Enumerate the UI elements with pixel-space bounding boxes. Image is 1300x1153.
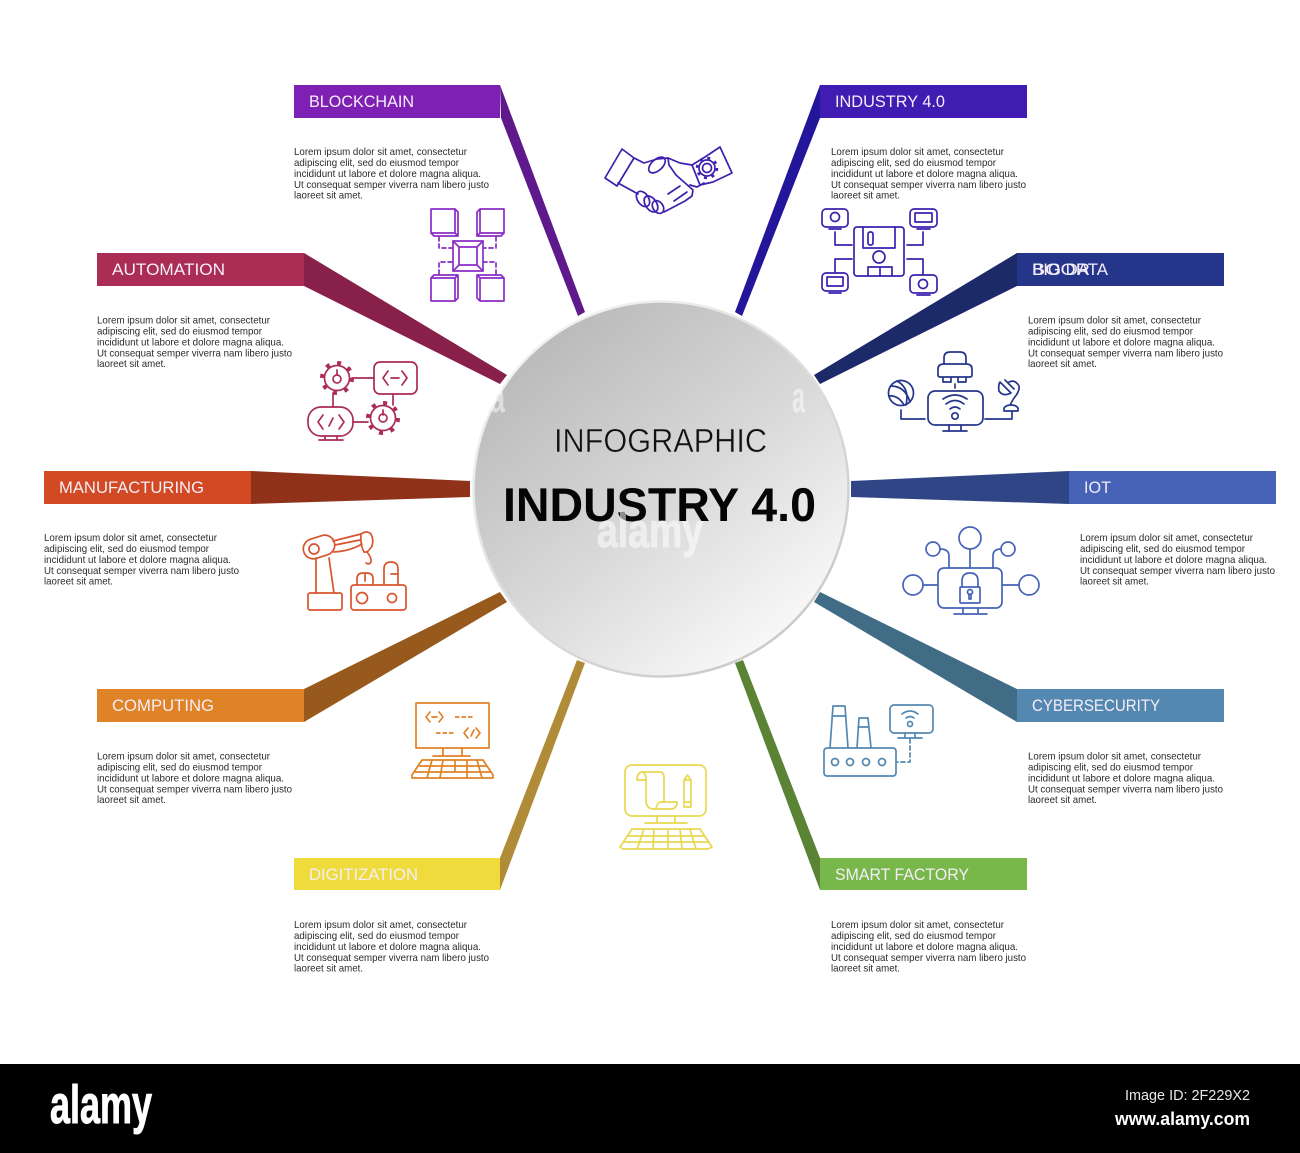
label bar: manufacturing [44,471,470,504]
footer image id: Image ID: 2F229X2 [1125,1087,1250,1104]
icon: robot arm and machine [301,532,406,610]
text block: digitization: Lorem ipsum dolor sit amet, consectetur [294,920,467,931]
text block: computing: adipiscing elit, sed do eiusmod tempor [97,762,262,774]
footer logo: alamy: alamy [50,1075,152,1135]
text block: digitization [294,920,489,974]
watermark: small marks on circle: a [490,373,505,422]
text block: automation: incididunt ut labore et dolore magna aliqua. [97,338,284,348]
text block: industry 4.0: Lorem ipsum dolor sit amet, consectetur [831,147,1004,158]
text block: digitization: adipiscing elit, sed do eiusmod tempor [294,931,459,942]
text block: smart factory: adipiscing elit, sed do eiusmod tempor [831,931,996,942]
text block: computing: laoreet sit amet. [97,795,166,806]
label bar: computing: COMPUTING [112,696,214,715]
text block: industry 4.0: incididunt ut labore et dolore magna aliqua. [831,169,1018,180]
panel: automation [97,253,507,440]
text block: cybersecurity [1028,752,1223,806]
text block: iot: adipiscing elit, sed do eiusmod tempor [1080,544,1245,555]
text block: big data: Lorem ipsum dolor sit amet, consectetur [1028,316,1201,326]
text block: iot: incididunt ut labore et dolore magna aliqua. [1080,555,1267,566]
panel: computing [97,592,507,806]
text block: iot: Lorem ipsum dolor sit amet, consectetur [1080,533,1253,544]
text block: computing [97,752,292,806]
icon: connected devices [888,352,1019,431]
label bar: digitization: DIGITIZATION [309,865,418,884]
label bar: automation: AUTOMATION [112,260,225,279]
label bar: industry 4.0: INDUSTRY 4.0 [835,92,945,111]
panel: cybersecurity [814,592,1224,806]
label bar: smart factory [735,660,1027,890]
watermark: small marks on circle: a [792,373,805,422]
watermark: small marks on circle [490,373,805,422]
text block: blockchain: Ut consequat semper viverra nam libero justo [294,180,489,191]
footer bar [0,1064,1300,1153]
icon: connected data network [822,209,937,295]
text block: smart factory [831,920,1026,974]
panel: smart factory [735,660,1027,974]
text block: cybersecurity: adipiscing elit, sed do eiusmod tempor [1028,762,1193,774]
panel: industry 4.0 [735,85,1027,316]
text block: industry 4.0: laoreet sit amet. [831,190,900,202]
text block: smart factory: incididunt ut labore et dolore magna aliqua. [831,942,1018,953]
text block: cybersecurity: incididunt ut labore et dolore magna aliqua. [1028,774,1215,784]
icon: gears and code [308,362,417,440]
text block: smart factory: laoreet sit amet. [831,964,900,974]
watermark: alamy: alamy [597,505,703,558]
text block: cybersecurity: Ut consequat semper viverra nam libero justo [1028,784,1223,796]
label bar: blockchain [294,85,585,316]
text block: digitization: incididunt ut labore et dolore magna aliqua. [294,942,481,953]
text block: blockchain: Lorem ipsum dolor sit amet, consectetur [294,147,467,158]
text block: big data: adipiscing elit, sed do eiusmod tempor [1028,326,1193,338]
text block: industry 4.0: adipiscing elit, sed do eiusmod tempor [831,158,996,169]
text block: blockchain: adipiscing elit, sed do eiusmod tempor [294,158,459,169]
label bar: digitization [294,660,585,890]
icon: computer with code [412,703,493,778]
text block: automation: laoreet sit amet. [97,359,166,370]
text block: smart factory: Ut consequat semper viverra nam libero justo [831,953,1026,964]
central circle [474,302,848,676]
text block: manufacturing: adipiscing elit, sed do eiusmod tempor [44,544,209,555]
heading: industry 4.0: INDUSTRY 4.0 [503,478,816,531]
text block: manufacturing: incididunt ut labore et dolore magna aliqua. [44,555,231,566]
text block: industry 4.0 [831,147,1026,202]
text block: computing: Lorem ipsum dolor sit amet, consectetur [97,752,270,762]
label bar: computing [97,592,507,722]
icon: locked network [903,527,1039,614]
text block: manufacturing: Ut consequat semper viverra nam libero justo [44,566,239,577]
label bar: cybersecurity [814,592,1224,722]
label bar: iot [851,471,1276,504]
label bar: big data [814,253,1224,384]
text block: iot: laoreet sit amet. [1080,576,1149,588]
panel: manufacturing [44,471,470,610]
text block: big data [1028,316,1223,370]
text block: iot: Ut consequat semper viverra nam libero justo [1080,566,1275,577]
text block: digitization: laoreet sit amet. [294,964,363,974]
icon: computer with scroll and pencil [620,765,712,849]
text block: big data: incididunt ut labore et dolore magna aliqua. [1028,338,1215,348]
text block: digitization: Ut consequat semper viverra nam libero justo [294,953,489,964]
icon: blockchain cubes [431,209,504,301]
label bar: industry 4.0 [735,85,1027,316]
text block: computing: Ut consequat semper viverra nam libero justo [97,784,292,796]
icon: handshake with gear [605,147,732,216]
label bar: big data: BOOR [1032,260,1090,279]
text block: smart factory: Lorem ipsum dolor sit amet, consectetur [831,920,1004,931]
text block: big data: Ut consequat semper viverra nam libero justo [1028,348,1223,360]
panel: big data [814,253,1224,431]
label bar: manufacturing: MANUFACTURING [59,478,204,497]
label bar: iot: IOT [1084,478,1111,497]
text block: manufacturing: Lorem ipsum dolor sit amet, consectetur [44,533,217,544]
text block: big data: laoreet sit amet. [1028,359,1097,370]
label bar: blockchain: BLOCKCHAIN [309,92,414,111]
text block: blockchain: incididunt ut labore et dolore magna aliqua. [294,169,481,180]
text block: iot [1080,533,1275,588]
label bar: cybersecurity: CYBERSECURITY [1032,696,1160,715]
icon: connected factory [824,705,933,776]
text block: cybersecurity: Lorem ipsum dolor sit amet, consectetur [1028,752,1201,762]
text block: blockchain [294,147,489,202]
text block: automation: Ut consequat semper viverra nam libero justo [97,348,292,360]
panel: blockchain [294,85,585,316]
footer website: www.alamy.com [1114,1109,1250,1129]
text block: automation: Lorem ipsum dolor sit amet, consectetur [97,316,270,326]
text block: cybersecurity: laoreet sit amet. [1028,795,1097,806]
panel: iot [851,471,1276,614]
text block: automation: adipiscing elit, sed do eiusmod tempor [97,326,262,338]
label bar: automation [97,253,507,384]
panel: digitization [294,660,712,974]
label bar: smart factory: SMART FACTORY [835,865,969,884]
text block: computing: incididunt ut labore et dolore magna aliqua. [97,774,284,784]
text block: industry 4.0: Ut consequat semper viverra nam libero justo [831,180,1026,191]
text block: automation [97,316,292,370]
label bar: big data: BIG DATA [1032,260,1109,279]
text block: manufacturing: laoreet sit amet. [44,576,113,588]
text block: blockchain: laoreet sit amet. [294,190,363,202]
heading: infographic: INFOGRAPHIC [554,422,767,459]
text block: manufacturing [44,533,239,588]
